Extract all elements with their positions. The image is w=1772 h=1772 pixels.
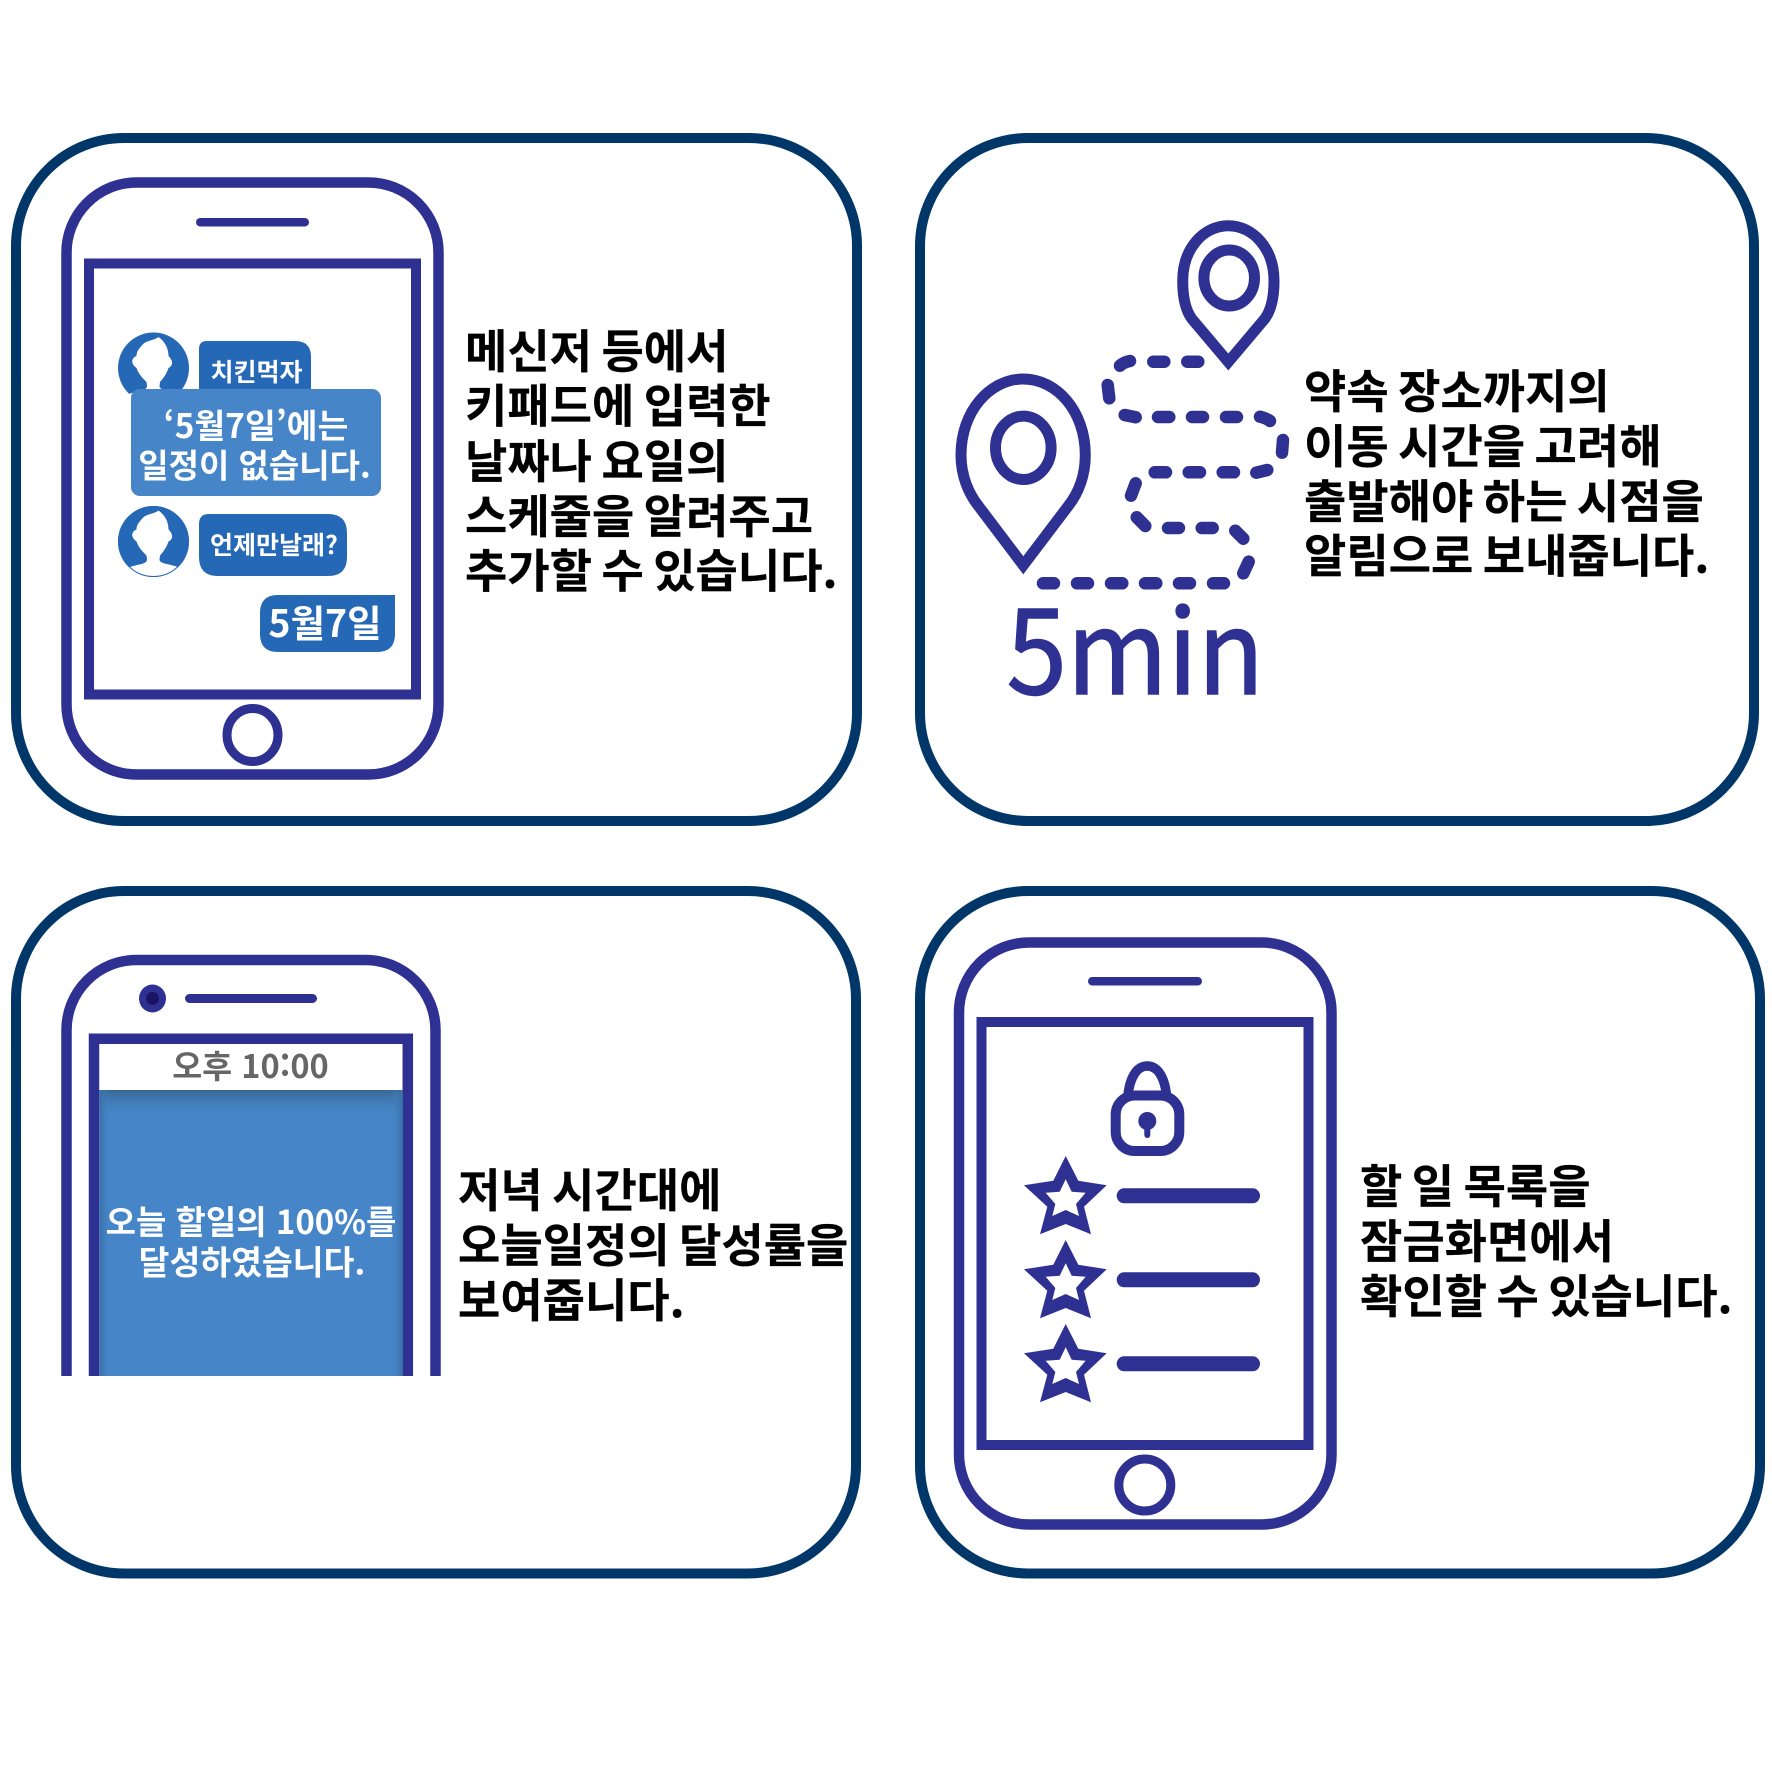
notification message: 오늘 할일의 100%를 (106, 1196, 396, 1244)
description text: 할 일 목록을 (1360, 1151, 1591, 1217)
avatar: second sender (118, 506, 189, 577)
description text: 키패드에 입력한 (465, 370, 771, 436)
description text (1304, 356, 1709, 586)
avatar: first sender (118, 332, 189, 404)
description text (1360, 1151, 1733, 1327)
list item 3 (1024, 1324, 1260, 1402)
chat bubble: chicken (199, 341, 311, 400)
phone speaker (196, 218, 309, 226)
panel border (16, 891, 856, 1574)
origin pin (961, 379, 1085, 565)
description text (465, 316, 838, 602)
description text: 추가할 수 있습니다. (465, 536, 838, 602)
description text: 날짜나 요일의 (465, 426, 728, 492)
panel: lock screen to-do list (920, 891, 1760, 1574)
chat bubble: when shall we meet: 언제만날래? (210, 526, 338, 562)
description text (458, 1155, 848, 1331)
panel border (16, 138, 857, 821)
description text: 약속 장소까지의 (1304, 356, 1610, 422)
notification background (99, 1090, 403, 1376)
icon: phone with checklist (959, 942, 1332, 1524)
list item 2 (1024, 1240, 1260, 1318)
chat bubble: May 7: 5월7일 (268, 593, 382, 648)
phone speaker (1088, 977, 1202, 986)
description text: 이동 시간을 고려해 (1304, 411, 1662, 477)
icon: phone with notification (66, 960, 436, 1376)
icon: padlock (1116, 1066, 1179, 1151)
description text: 스케줄을 알려주고 (465, 481, 813, 547)
description text: 잠금화면에서 (1360, 1206, 1614, 1272)
panel: travel time alert (920, 138, 1754, 821)
label: 5min: 5min (1006, 560, 1264, 728)
chat bubble: chicken: 치킨먹자 (210, 353, 303, 389)
description text: 보여줍니다. (458, 1265, 685, 1331)
phone camera (139, 984, 166, 1012)
description text: 확인할 수 있습니다. (1360, 1261, 1733, 1327)
notice bubble: no schedule: 일정이 없습니다. (138, 440, 371, 488)
notification message: 달성하였습니다. (139, 1236, 365, 1284)
phone home button (1119, 1459, 1171, 1511)
phone body (66, 182, 438, 774)
icon: smartphone with chat (66, 182, 438, 774)
time label: 오후 10:00 (172, 1041, 329, 1088)
icon: route between two pins (961, 226, 1283, 728)
panel border (920, 891, 1760, 1574)
description text: 출발해야 하는 시점을 (1304, 466, 1704, 532)
notification message (106, 1196, 396, 1284)
screen frame (94, 1039, 408, 1376)
phone screen (982, 1022, 1308, 1445)
panel border (920, 138, 1754, 821)
phone home button (227, 708, 278, 762)
notice bubble: no schedule: ‘5월7일’에는 (164, 399, 348, 448)
chat bubble: when shall we meet (199, 514, 347, 576)
destination pin (1183, 226, 1274, 362)
description text: 저녁 시간대에 (458, 1155, 721, 1221)
phone body (959, 942, 1332, 1524)
description text: 메신저 등에서 (465, 316, 728, 382)
panel: messenger date detection (16, 138, 857, 821)
phone speaker (185, 994, 317, 1003)
description text: 알림으로 보내줍니다. (1304, 520, 1709, 586)
phone body, cut at bottom (66, 960, 436, 1376)
phone screen (89, 264, 416, 694)
description text: 오늘일정의 달성률을 (458, 1210, 848, 1276)
dotted route (1043, 361, 1283, 583)
notice bubble: no schedule (131, 389, 381, 496)
panel: achievement notification (16, 891, 856, 1574)
list item 1 (1024, 1156, 1260, 1234)
